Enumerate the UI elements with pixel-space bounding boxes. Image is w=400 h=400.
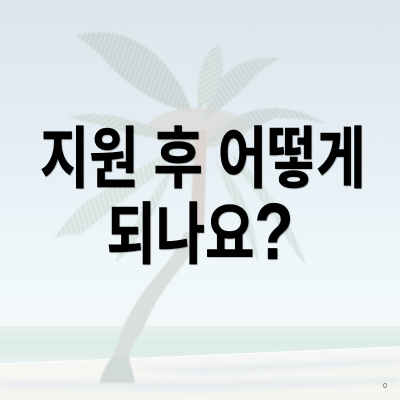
palm tree: [54, 32, 326, 383]
middle right frond: [205, 108, 326, 144]
crown: [148, 108, 248, 148]
title line 2: 되나요?: [106, 187, 294, 276]
sand shadows: [0, 358, 400, 392]
title line 1: 지원 후 어떻게: [40, 122, 366, 197]
middle left frond: [68, 114, 195, 142]
trunk: [100, 232, 200, 383]
crown stem: [190, 130, 207, 232]
sea: [0, 326, 400, 366]
lower left frond: [54, 150, 175, 240]
upper centre frond: [197, 44, 223, 110]
trunk base: [100, 357, 135, 383]
small watermark glyph: 0: [383, 383, 387, 390]
upper left frond: [76, 32, 192, 112]
lower centre left frond: [115, 170, 170, 262]
lower right frond: [228, 150, 306, 264]
sand: [0, 347, 400, 400]
lower centre right frond: [215, 160, 258, 262]
upper right frond: [202, 57, 282, 120]
shoreline foam: [0, 347, 400, 364]
